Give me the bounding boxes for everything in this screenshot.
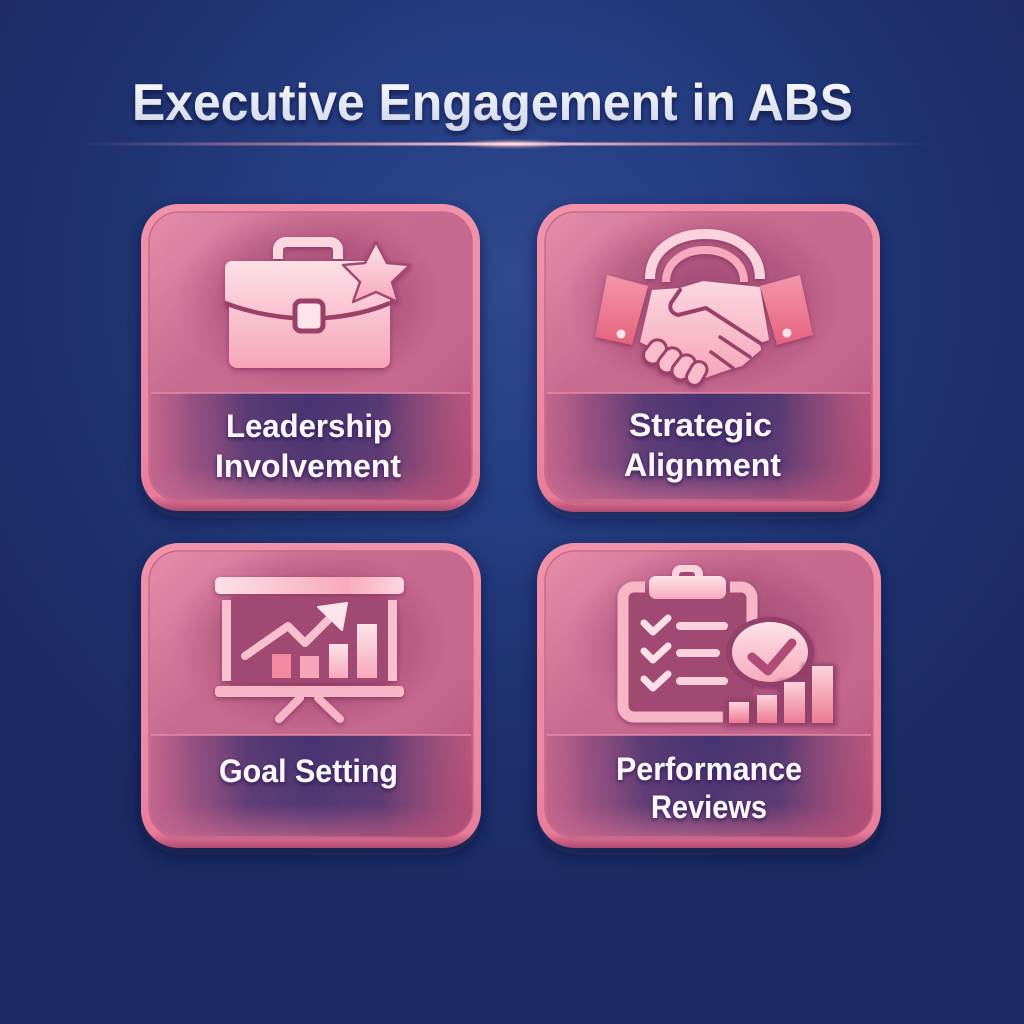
label [215,408,401,484]
label [616,751,802,825]
title divider with glow [80,139,930,149]
label [624,407,781,483]
panel: Performance Reviews [537,543,881,848]
label: Alignment [624,447,781,483]
panel: Strategic Alignment [537,204,880,512]
label: Performance [616,751,802,787]
icon: handshake [595,234,813,388]
panel: Leadership Involvement [141,204,480,511]
icon: clipboard with check bubble and bars [623,565,836,725]
label: Goal Setting [219,753,398,789]
icon: briefcase with star [225,242,410,368]
label: Involvement [215,448,401,484]
icon: presentation board with chart [215,577,404,719]
label: Leadership [226,408,392,444]
panel: Goal Setting [141,543,481,848]
label: Strategic [629,407,772,443]
label: Reviews [651,789,767,825]
title: Executive Engagement in ABS [132,74,853,132]
